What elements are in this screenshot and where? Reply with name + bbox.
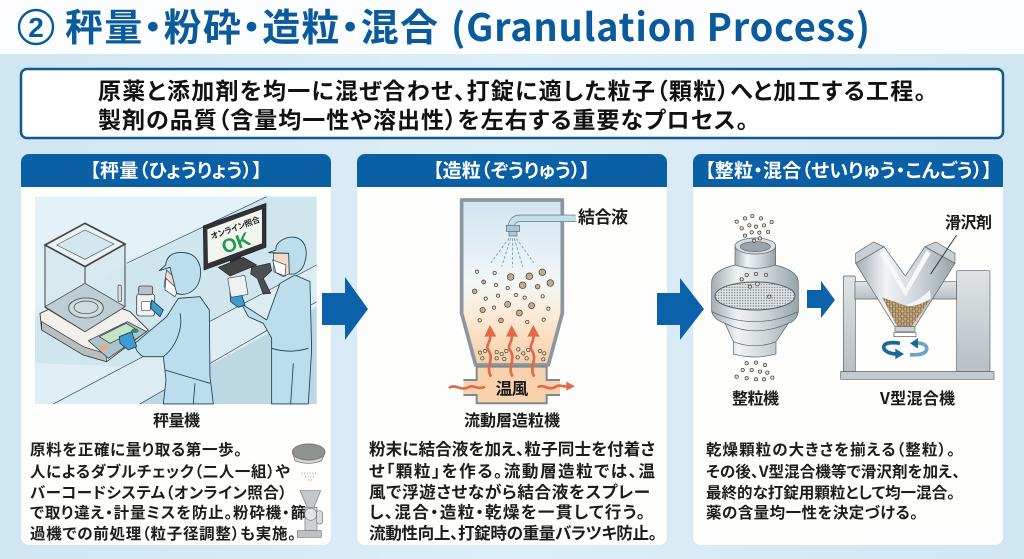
text: sizing and blending description: 乾燥顆粒の大きさを揃える（整粒）。 (706, 438, 955, 460)
title: 2 (28, 12, 44, 43)
arrow: granulation to sizing (657, 278, 704, 340)
intro callout box (21, 69, 1003, 138)
illustration: V blender (841, 235, 994, 379)
label: V blender: V型混合機 (879, 385, 955, 409)
panel: sizing and blending (693, 154, 1003, 545)
label: lubricant: 滑沢剤 (945, 209, 992, 233)
text: weighing description: 人によるダブルチェック（二人一組）や (30, 460, 290, 482)
particles (472, 269, 554, 361)
intro callout box: 原薬と添加剤を均一に混ぜ合わせ、打錠に適した粒子（顆粒）へと加工する工程。 (98, 72, 926, 106)
balance (40, 223, 148, 362)
intro callout box: 製剤の品質（含量均一性や溶出性）を左右する重要なプロセス。 (98, 101, 748, 135)
illustration: sizing mill (712, 214, 798, 381)
label: balance: 秤量機 (153, 407, 200, 431)
bottle (137, 286, 155, 316)
text: granulation description: し、混合・造粒・乾燥を一貫して行う。 (369, 499, 645, 523)
text: weighing description: 過機での前処理（粒子径調整）も実施。 (30, 522, 296, 544)
rotation arrow heads (895, 338, 918, 359)
label: binder liquid: 結合液 (578, 203, 628, 228)
small arrow: mill to blender (807, 281, 835, 318)
monitor (203, 203, 266, 276)
monitor: OK (219, 229, 254, 259)
panel 1 header: 【秤量（ひょうりょう）】 (90, 156, 262, 183)
text: granulation description: 粉末に結合液を加え、粒子同士を付着さ (369, 436, 655, 460)
rotation arrows (884, 343, 927, 355)
text: granulation description: 流動性向上、打錠時の重量バラツキ防止。 (369, 520, 657, 544)
panel 3 card (693, 154, 1003, 545)
worker 1 (119, 252, 213, 404)
worker 2 (228, 237, 312, 404)
label: fluid bed granulator: 流動層造粒機 (464, 407, 560, 431)
monitor: オンライン照合 (209, 214, 262, 242)
arrow: weighing to granulation (322, 277, 368, 340)
label: sizing mill: 整粒機 (732, 385, 779, 409)
panel 2 header: 【造粒（ぞうりゅう）】 (433, 156, 590, 183)
text: sizing and blending description: 薬の含量均一性を決定づける。 (706, 501, 918, 523)
text: weighing description: で取り違え・計量ミスを防止。粉砕機・篩 (30, 501, 306, 523)
icon: mill (297, 491, 323, 537)
arrow heads (484, 325, 575, 391)
panel 1 card (21, 154, 331, 545)
text: sizing and blending description (706, 438, 960, 523)
panel 2 header (357, 154, 667, 187)
text: sizing and blending description: その後、V型混合機等で滑沢剤を加え、 (706, 460, 960, 482)
icon: sieve (292, 444, 325, 480)
panel 1 header (21, 154, 331, 187)
illustration: fluid bed granulator (449, 200, 576, 403)
title (19, 0, 870, 52)
text: weighing description (30, 438, 306, 544)
title band (0, 0, 1024, 54)
hot air arrows (449, 335, 568, 389)
bottom windbox: 温風 (496, 375, 529, 399)
panel 2 card (357, 154, 667, 545)
binder pipe and nozzle (506, 218, 576, 236)
text: weighing description: 原料を正確に量り取る第一歩。 (30, 438, 242, 460)
bottom windbox (463, 367, 560, 403)
text: granulation description: 風で浮遊させながら結合液をスプレー (369, 479, 650, 503)
illustration: weighing room (35, 197, 317, 404)
text: granulation description (369, 436, 657, 544)
spray (491, 238, 534, 267)
text: weighing description: バーコードシステム（オンライン照合） (30, 481, 287, 503)
panel: granulation (357, 154, 667, 545)
panel 3 header: 【整粒・混合（せいりゅう・こんごう）】 (705, 156, 992, 183)
text: granulation description: せ「顆粒」を作る。流動層造粒では、温 (369, 458, 655, 482)
panel: weighing (21, 154, 331, 545)
text: sizing and blending description: 最終的な打錠用顆粒として均一混合。 (706, 481, 955, 503)
